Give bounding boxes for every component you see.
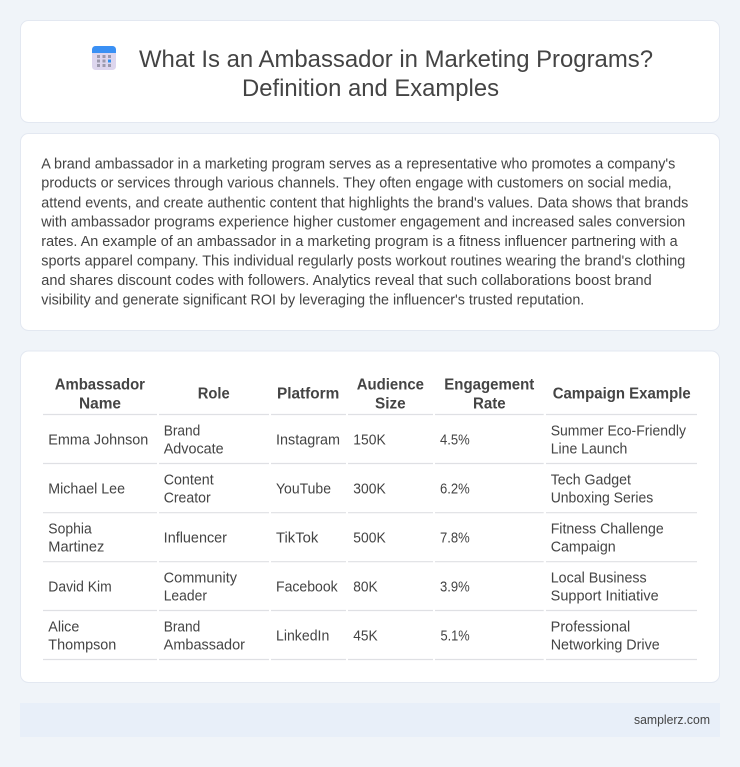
icon: calendar <box>92 46 116 70</box>
table header row: Engagement <box>444 376 534 393</box>
footer bar <box>20 703 720 737</box>
text block: description paragraph: A brand ambassador in a marketing program serves as a representative who promotes a company's <box>41 156 675 172</box>
table row: Emma Johnson: 4.5% <box>440 433 470 449</box>
table header row: Name <box>79 395 121 412</box>
text block: description paragraph: with ambassador programs experience higher customer engagement and increased sales conversion <box>40 214 685 230</box>
table row: Alice Thompson: Professional <box>551 620 630 636</box>
table row: Emma Johnson <box>43 424 697 464</box>
title <box>139 46 653 102</box>
table row: David Kim: Facebook <box>276 580 338 596</box>
table row: Alice Thompson: Ambassador <box>164 638 245 654</box>
table row: David Kim: Support Initiative <box>551 589 659 605</box>
table row: Sophia Martinez: Influencer <box>164 531 227 547</box>
table row: David Kim: 3.9% <box>440 580 470 596</box>
table row: Alice Thompson: 45K <box>353 629 378 645</box>
table row: David Kim <box>43 571 697 610</box>
table header row: Rate <box>473 395 506 412</box>
table row: Emma Johnson: Line Launch <box>551 442 627 458</box>
text block: description paragraph <box>40 156 688 308</box>
table row: Alice Thompson: 5.1% <box>440 629 470 645</box>
footer text: source: samplerz.com <box>634 713 710 727</box>
table row: Sophia Martinez: Martinez <box>48 540 104 556</box>
text block: description paragraph: and shares discount codes with followers. Analytics reveal that such collaborations boost brand <box>41 273 652 289</box>
table header row <box>43 376 697 414</box>
table row: Emma Johnson: 150K <box>353 433 386 449</box>
table row: David Kim: Leader <box>164 589 207 605</box>
panel: title header <box>20 20 720 122</box>
table header row: Size <box>375 395 406 412</box>
table header row: Campaign Example <box>553 386 691 403</box>
text block: description paragraph: products or services through various channels. They often engage with customers on social media, <box>41 175 672 191</box>
table row: David Kim: David Kim <box>48 580 112 596</box>
table row: Sophia Martinez <box>43 522 697 562</box>
table row: Michael Lee: Tech Gadget <box>551 473 631 489</box>
table row: Michael Lee: Content <box>164 473 214 489</box>
table header row: Audience <box>357 376 424 393</box>
title: What Is an Ambassador in Marketing Programs? <box>139 46 653 73</box>
table row: Alice Thompson: Networking Drive <box>551 638 660 654</box>
table row: Michael Lee: Michael Lee <box>48 482 125 498</box>
table row: David Kim: Local Business <box>551 571 647 587</box>
table row: Sophia Martinez: Campaign <box>551 540 616 556</box>
table row: Sophia Martinez: Fitness Challenge <box>551 522 664 538</box>
table row: Michael Lee: Creator <box>164 491 211 507</box>
text block: description paragraph: attend events, and create authentic content that highlights the brand's values. Data shows that brands <box>41 195 688 211</box>
table row: Michael Lee <box>43 473 697 513</box>
table row: Michael Lee: 6.2% <box>440 482 470 498</box>
table row: Michael Lee: Unboxing Series <box>551 491 653 507</box>
table row: Alice Thompson: LinkedIn <box>276 629 329 645</box>
table header row: Ambassador <box>55 376 145 393</box>
table row: Sophia Martinez: TikTok <box>276 531 319 547</box>
table row: Michael Lee: 300K <box>353 482 386 498</box>
table row: Michael Lee: YouTube <box>276 482 331 498</box>
text block: description paragraph: visibility and generate significant ROI by leveraging the influencer's trusted reputation. <box>41 292 584 308</box>
table row: David Kim: 80K <box>353 580 378 596</box>
table header row: Platform <box>277 386 339 403</box>
panel: ambassador table <box>20 351 720 682</box>
table header row: Role <box>198 386 230 403</box>
table row: Sophia Martinez: Sophia <box>48 522 92 538</box>
table row: David Kim: Community <box>164 571 238 587</box>
table row: Emma Johnson: Brand <box>164 424 200 440</box>
table row: Alice Thompson: Alice <box>48 620 79 636</box>
table row: Emma Johnson: Instagram <box>276 433 340 449</box>
text block: description paragraph: sports apparel company. This individual regularly posts workout routines wearing the brand's clothing <box>41 253 685 269</box>
panel: description <box>20 134 720 330</box>
table row: Alice Thompson <box>43 620 697 660</box>
table row: Emma Johnson: Summer Eco-Friendly <box>551 424 687 440</box>
title: Definition and Examples <box>242 75 499 102</box>
table row: Emma Johnson: Advocate <box>164 442 224 458</box>
text block: description paragraph: rates. An example of an ambassador in a marketing program is a fitness influencer partnering with a <box>41 234 678 250</box>
table row: Alice Thompson: Brand <box>164 620 200 636</box>
table row: Emma Johnson: Emma Johnson <box>48 433 148 449</box>
table row: Sophia Martinez: 7.8% <box>440 531 470 547</box>
table row: Alice Thompson: Thompson <box>48 638 116 654</box>
table row: Sophia Martinez: 500K <box>353 531 386 547</box>
